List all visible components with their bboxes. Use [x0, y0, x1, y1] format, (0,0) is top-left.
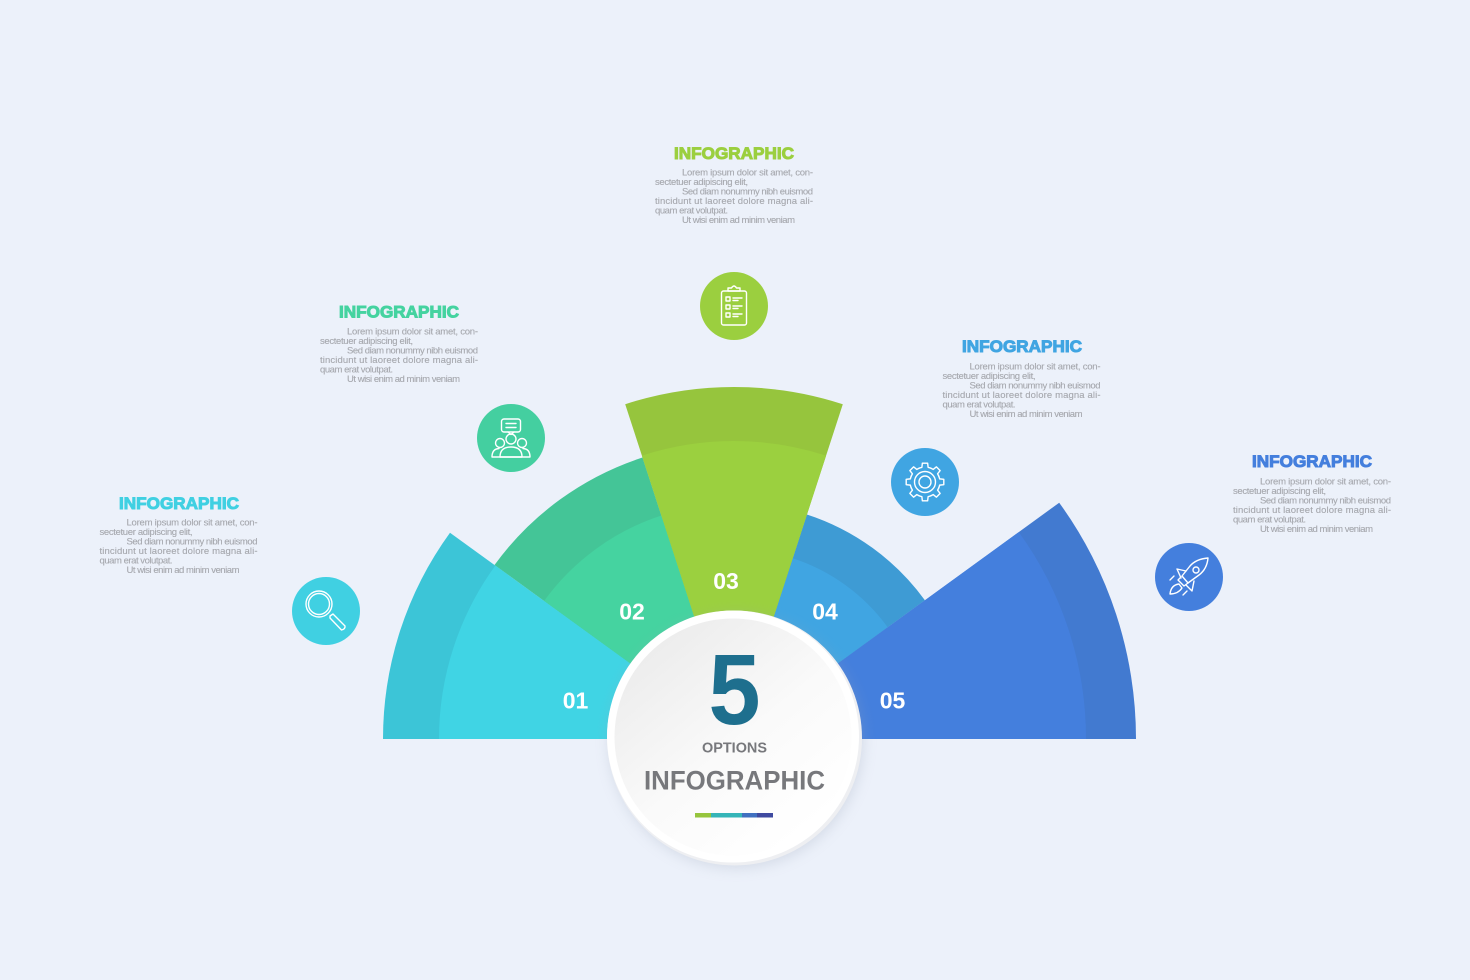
- text block 05: quam erat volutpat.: [1233, 514, 1306, 526]
- text block 03: Ut wisi enim ad minim veniam: [682, 215, 795, 226]
- heading 04: INFOGRAPHIC: [962, 337, 1082, 356]
- number 04: 04: [812, 598, 838, 624]
- text block 05: sectetuer adipiscing elit,: [1233, 486, 1326, 497]
- icon: gear: [891, 448, 959, 516]
- colour bar: [695, 813, 773, 818]
- infographic label: INFOGRAPHIC: [644, 766, 825, 796]
- number 02: 02: [619, 598, 645, 624]
- text block 02: Lorem ipsum dolor sit amet, con-: [347, 326, 478, 338]
- options label: OPTIONS: [702, 740, 767, 756]
- segment 01: [383, 533, 734, 739]
- segment 03: [625, 387, 843, 739]
- text block 04: [942, 337, 1100, 420]
- heading 01: INFOGRAPHIC: [119, 494, 239, 513]
- text block 01: quam erat volutpat.: [100, 556, 172, 566]
- text block 02: tincidunt ut laoreet dolore magna ali-: [320, 355, 478, 366]
- centre disc: [607, 610, 863, 868]
- text block 02: [320, 302, 478, 385]
- text block 05: Lorem ipsum dolor sit amet, con-: [1260, 476, 1391, 488]
- text block 04: quam erat volutpat.: [942, 400, 1016, 410]
- heading 05: INFOGRAPHIC: [1252, 452, 1372, 471]
- icon: rocket: [1155, 543, 1223, 611]
- text block 01: tincidunt ut laoreet dolore magna ali-: [100, 546, 258, 557]
- text block 02: Ut wisi enim ad minim veniam: [347, 374, 460, 385]
- text block 01: Lorem ipsum dolor sit amet, con-: [126, 518, 258, 528]
- text block 01: [100, 494, 258, 576]
- text block 03: tincidunt ut laoreet dolore magna ali-: [655, 196, 813, 207]
- text block 05: tincidunt ut laoreet dolore magna ali-: [1233, 505, 1391, 516]
- number 05: 05: [880, 688, 905, 714]
- text block 04: Ut wisi enim ad minim veniam: [970, 409, 1083, 420]
- number 03: 03: [713, 568, 739, 594]
- segment 02: [494, 458, 734, 739]
- text block 01: Ut wisi enim ad minim veniam: [126, 565, 240, 576]
- text block 01: sectetuer adipiscing elit,: [100, 527, 192, 538]
- text block 04: Lorem ipsum dolor sit amet, con-: [970, 362, 1100, 372]
- text block 04: tincidunt ut laoreet dolore magna ali-: [942, 390, 1100, 401]
- text block 05: Ut wisi enim ad minim veniam: [1260, 524, 1373, 535]
- heading 03: INFOGRAPHIC: [674, 144, 794, 163]
- text block 04: sectetuer adipiscing elit,: [942, 371, 1036, 382]
- number 01: 01: [563, 688, 588, 714]
- heading 02: INFOGRAPHIC: [339, 302, 459, 322]
- text block 02: sectetuer adipiscing elit,: [320, 336, 413, 347]
- text block 04: Sed diam nonummy nibh euismod: [970, 380, 1100, 392]
- text block 01: Sed diam nonummy nibh euismod: [126, 536, 258, 548]
- segment 05: [734, 503, 1136, 739]
- text block 02: Sed diam nonummy nibh euismod: [347, 346, 478, 356]
- icon: clipboard: [700, 272, 768, 340]
- text block 03: Lorem ipsum dolor sit amet, con-: [682, 168, 813, 178]
- text block 03: quam erat volutpat.: [655, 206, 728, 216]
- text block 03: sectetuer adipiscing elit,: [655, 177, 748, 188]
- text block 03: [655, 144, 813, 226]
- text block 05: Sed diam nonummy nibh euismod: [1260, 496, 1391, 506]
- big number 5: 5: [708, 634, 760, 746]
- text block 05: [1233, 452, 1391, 535]
- icon: magnifier: [292, 577, 360, 645]
- segment 04: [734, 514, 925, 739]
- text block 03: Sed diam nonummy nibh euismod: [682, 186, 813, 198]
- icon: team with speech bubble: [477, 404, 545, 472]
- text block 02: quam erat volutpat.: [320, 364, 393, 376]
